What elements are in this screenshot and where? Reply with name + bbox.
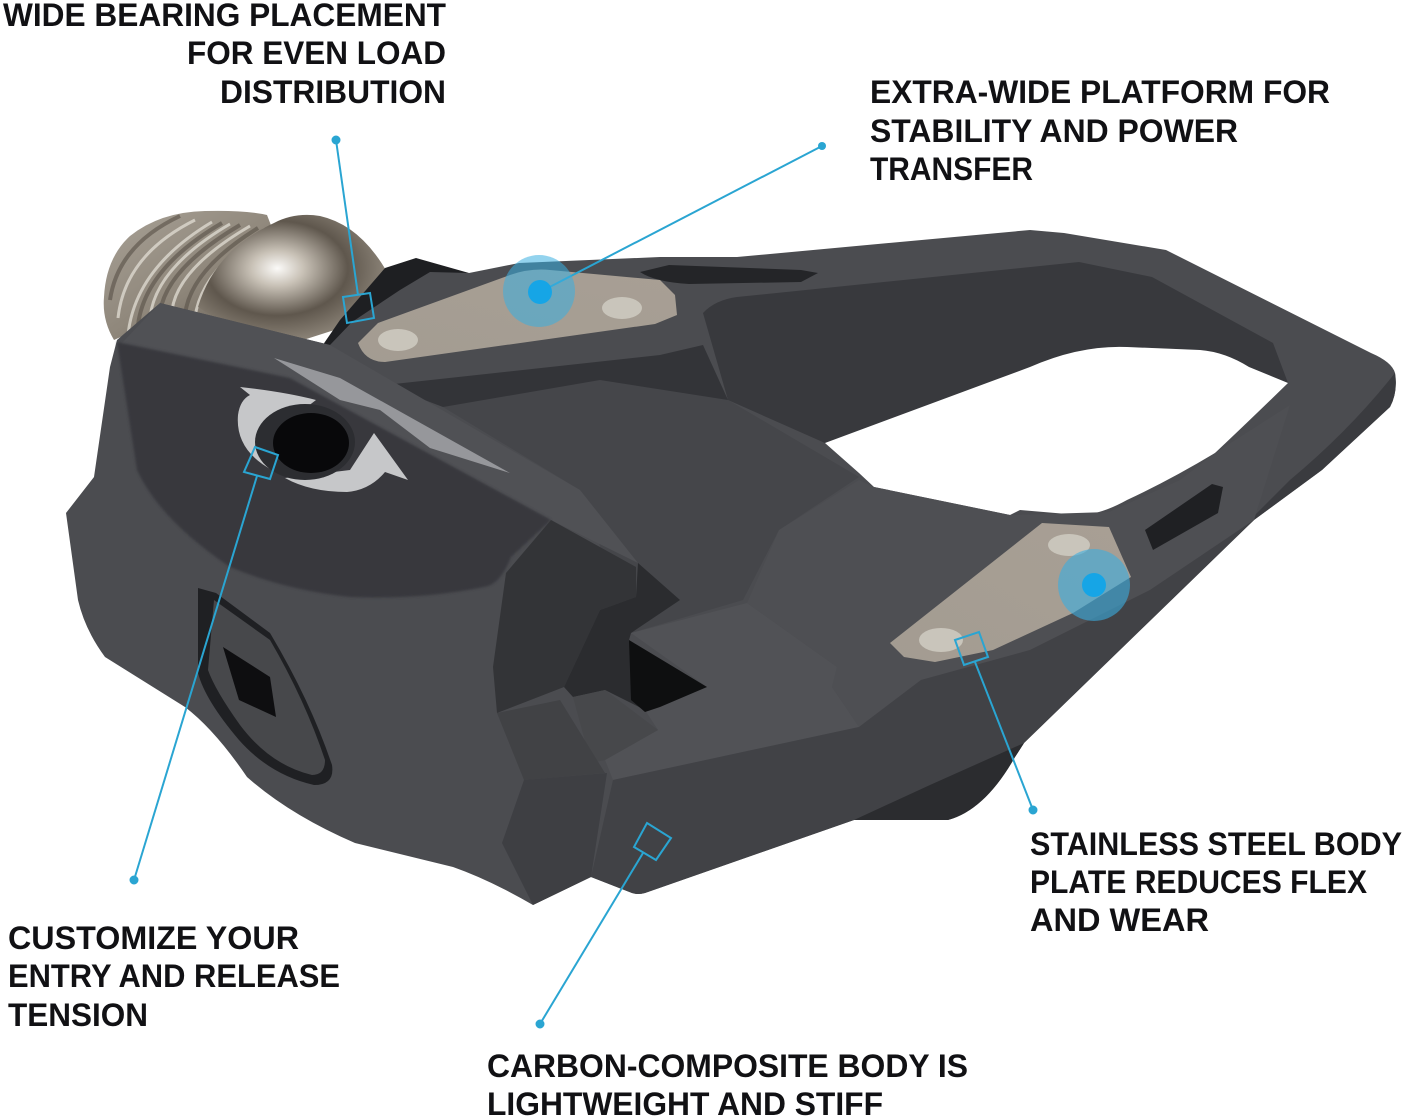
- arm underside: [703, 262, 1288, 443]
- right arm top facet: [747, 405, 1290, 727]
- steel plate: upper: [358, 270, 677, 362]
- logo crescents: [238, 387, 408, 492]
- small lip: [573, 690, 658, 763]
- lower front block: [497, 700, 605, 780]
- text: customize tension: CUSTOMIZE YOUR: [8, 920, 299, 956]
- pedal opening: [825, 347, 1288, 515]
- right arm outer edge: [1180, 373, 1396, 590]
- pedal body silhouette: [66, 230, 1396, 905]
- pedal illustration: [66, 211, 1396, 905]
- text: extra-wide platform: STABILITY AND POWER: [870, 113, 1238, 149]
- side slot window: [198, 588, 332, 785]
- spindle thread: [104, 211, 300, 340]
- callout marker: lower plate dot: [1058, 549, 1130, 621]
- text: stainless steel: [1030, 826, 1402, 938]
- text: extra-wide platform: TRANSFER: [870, 151, 1033, 187]
- lower right face: [591, 520, 1254, 894]
- text: wide bearing: FOR EVEN LOAD: [187, 35, 446, 71]
- text: carbon composite: [487, 1048, 968, 1119]
- text: customize tension: TENSION: [8, 997, 148, 1033]
- front shadow facet: [493, 520, 636, 713]
- right arm slot: [1145, 484, 1223, 550]
- callout line: stainless steel: [955, 632, 1036, 814]
- text: wide bearing: DISTRIBUTION: [220, 74, 446, 110]
- underside lobe: [854, 743, 1024, 820]
- wedge under upper plate: [385, 345, 728, 407]
- steel plate: lower: [890, 523, 1131, 662]
- adjustment bolt hole: [255, 404, 355, 480]
- text: stainless steel: PLATE REDUCES FLEX: [1030, 864, 1368, 900]
- dark cavity: [629, 640, 707, 712]
- callout line: tension: [130, 447, 278, 884]
- upper arm slot: [640, 265, 818, 284]
- text: extra-wide platform: EXTRA-WIDE PLATFORM FOR: [870, 74, 1330, 110]
- spindle ball: [198, 215, 387, 342]
- cam top band: [120, 303, 638, 563]
- bearing clip: [318, 258, 469, 352]
- central body facet: [443, 360, 859, 633]
- cam dark curved face: [117, 342, 551, 598]
- text: stainless steel: AND WEAR: [1030, 902, 1209, 938]
- text: customize tension: ENTRY AND RELEASE: [8, 958, 340, 994]
- text: wide bearing: [3, 0, 446, 110]
- text: customize tension: [8, 920, 340, 1033]
- logo swoosh: [274, 358, 510, 473]
- front corner face: [502, 773, 607, 905]
- text: extra-wide platform: [870, 74, 1330, 187]
- callout line: wide bearing: [332, 136, 374, 323]
- callout line: carbon composite: [536, 823, 671, 1028]
- callout line: extra-wide platform: [503, 142, 826, 327]
- centre block: [605, 603, 859, 780]
- inner recess: [564, 563, 680, 710]
- text: carbon composite: CARBON-COMPOSITE BODY IS: [487, 1048, 968, 1084]
